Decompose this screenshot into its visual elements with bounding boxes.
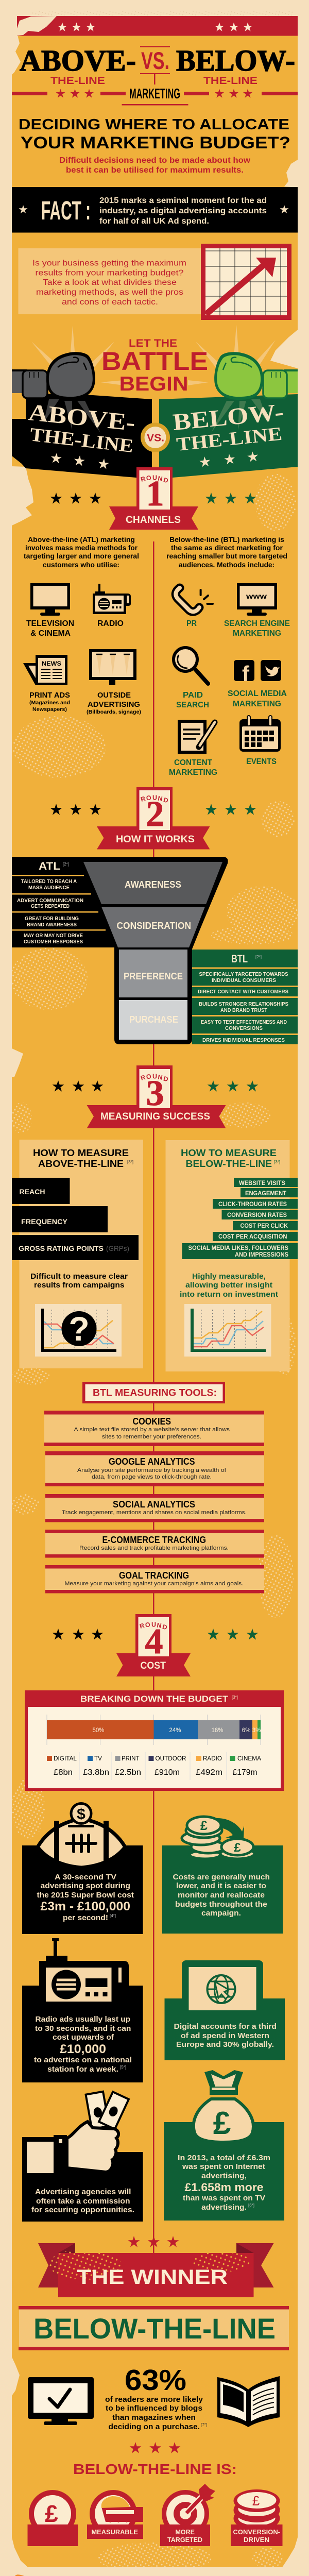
panel: BTL list: DIRECT CONTACT WITH CUSTOMERS bbox=[198, 989, 288, 995]
panel: how to measure above-the-line: HOW TO MEASURE bbox=[33, 1147, 129, 1158]
panel: super bowl cost: £3m - £100,000 bbox=[40, 1900, 130, 1913]
panel: how to measure below-the-line: AND IMPRESSIONS bbox=[235, 1252, 288, 1258]
icon: radio: RADIO bbox=[97, 619, 124, 628]
icon: paid search magnifier bbox=[174, 648, 209, 709]
panel: super bowl cost: A 30-second TV bbox=[55, 1873, 116, 1882]
round 4 badge bbox=[53, 1614, 258, 1676]
panel: internet spend: was spent on Internet bbox=[182, 2163, 265, 2171]
round 2 badge: HOW IT WORKS bbox=[116, 834, 195, 845]
chart: breaking down the budget: RADIO bbox=[203, 1755, 222, 1762]
panel: radio ads bbox=[22, 1938, 143, 2082]
chart: breaking down the budget bbox=[25, 1690, 284, 1791]
panel: BTL list: AND BRAND TRUST bbox=[220, 1008, 267, 1013]
panel: radio ads: station for a week. bbox=[47, 2065, 118, 2074]
panel: internet spend: advertising, bbox=[201, 2172, 247, 2180]
icon: content marketing bbox=[169, 720, 217, 777]
panel: cookies: COOKIES bbox=[133, 1416, 171, 1427]
panel: lower costs: budgets throughout the bbox=[175, 1901, 267, 1909]
panel: e-commerce tracking bbox=[45, 1530, 264, 1558]
panel: below-the-line fighter: THE-LINE bbox=[176, 423, 283, 455]
icon: conversion-driven: DRIVEN bbox=[244, 2536, 269, 2544]
panel: fact band: FACT : bbox=[41, 196, 91, 225]
chart: breaking down the budget: TV bbox=[94, 1755, 102, 1762]
chart: breaking down the budget: 16% bbox=[211, 1727, 224, 1734]
icon: radio bbox=[93, 584, 131, 628]
icon: billboard: ADVERTISING bbox=[88, 700, 140, 709]
text: ATL definition: involves mass media methods for bbox=[25, 544, 138, 552]
stat: 63 percent: deciding on a purchase. bbox=[108, 2423, 200, 2431]
icon: events calendar: EVENTS bbox=[246, 757, 277, 766]
panel: lower costs: £ bbox=[234, 1841, 241, 1855]
panel: how to measure above-the-line: results from campaigns bbox=[34, 1281, 125, 1290]
funnel chart bbox=[12, 857, 228, 1044]
panel: how to measure below-the-line: HOW TO MEASURE bbox=[181, 1147, 277, 1158]
icon: more targeted: MORE bbox=[175, 2528, 195, 2536]
round 4 badge: COST bbox=[140, 1660, 166, 1671]
title: ABOVE- bbox=[20, 44, 136, 77]
subtitle heading: Difficult decisions need to be made about how bbox=[59, 156, 251, 165]
title: THE-LINE bbox=[50, 75, 105, 87]
panel: BTL list: BUILDS STRONGER RELATIONSHIPS bbox=[199, 1002, 288, 1007]
panel: how to measure above-the-line: REACH bbox=[20, 1188, 45, 1196]
icon: more targeted: TARGETED bbox=[167, 2536, 202, 2544]
icon: print ads: Newspapers) bbox=[32, 706, 67, 713]
panel: above-the-line fighter: THE-LINE bbox=[29, 424, 134, 457]
round 2 badge: 2 bbox=[146, 794, 164, 834]
chart: breaking down the budget: £8bn bbox=[54, 1768, 73, 1777]
panel: ATL list: ATL bbox=[39, 860, 60, 872]
panel: fact band: 2015 marks a seminal moment for the ad bbox=[99, 196, 267, 205]
panel: how to measure below-the-line: COST PER CLICK bbox=[240, 1223, 288, 1229]
chart: breaking down the budget: £2.5bn bbox=[115, 1768, 141, 1777]
heading: winner below-the-line bbox=[19, 2306, 289, 2350]
heading: winner below-the-line: BELOW-THE-LINE bbox=[33, 2312, 276, 2345]
text: BTL definition: audiences. Methods include: bbox=[179, 561, 274, 569]
panel: goal tracking bbox=[45, 1565, 264, 1593]
stat: 63 percent: 63% bbox=[125, 2364, 186, 2397]
panel: ATL list: [2*] bbox=[63, 862, 69, 867]
panel: how to measure below-the-line: COST PER ACQUISITION bbox=[218, 1234, 287, 1240]
chart: breaking down the budget: 24% bbox=[169, 1727, 181, 1734]
panel: how to measure above-the-line: Difficult to measure clear bbox=[30, 1272, 128, 1281]
icon: growth chart bbox=[201, 244, 291, 320]
chart: breaking down the budget: BREAKING DOWN THE BUDGET bbox=[80, 1694, 229, 1704]
round 3 badge: MEASURING SUCCESS bbox=[100, 1111, 210, 1122]
panel: goal tracking: GOAL TRACKING bbox=[119, 1570, 189, 1581]
panel: ATL list: GETS REPEATED bbox=[31, 904, 70, 909]
icon: cost effective: £ bbox=[45, 2500, 58, 2527]
text: ATL definition bbox=[24, 536, 139, 569]
heading: BTL measuring tools bbox=[82, 1382, 225, 1403]
chart: breaking down the budget: 6% bbox=[242, 1727, 250, 1734]
panel: fact band: industry, as digital advertising accounts bbox=[99, 207, 267, 215]
panel: ATL list: MAY OR MAY NOT DRIVE bbox=[24, 933, 83, 939]
round 3 badge: ROUND bbox=[140, 1073, 169, 1083]
panel: super bowl cost bbox=[22, 1802, 143, 1934]
panel: BTL list bbox=[192, 950, 298, 1044]
panel: digital share: Europe and 30% globally. bbox=[176, 2041, 274, 2049]
heading: let the battle begin: BEGIN bbox=[119, 373, 188, 395]
panel: how to measure above-the-line: (GRPs) bbox=[106, 1244, 129, 1252]
funnel chart: PREFERENCE bbox=[124, 971, 183, 981]
intro text block: results from your marketing budget? bbox=[35, 269, 184, 277]
subtitle heading: DECIDING WHERE TO ALLOCATE bbox=[19, 116, 289, 133]
panel: how to measure above-the-line: ABOVE-THE-LINE bbox=[38, 1158, 124, 1169]
icon: monitor with check bbox=[28, 2377, 94, 2425]
chart: breaking down the budget: DIGITAL bbox=[54, 1755, 77, 1762]
icon: print ads: NEWS bbox=[42, 660, 61, 667]
round 1 badge: ROUND bbox=[140, 474, 169, 484]
heading: let the battle begin: BATTLE bbox=[101, 347, 208, 376]
chart: breaking down the budget: OUTDOOR bbox=[156, 1755, 186, 1762]
text: ATL definition: customers who utilise: bbox=[43, 561, 119, 569]
panel: social analytics: SOCIAL ANALYTICS bbox=[113, 1499, 195, 1510]
panel: agency commission: often take a commission bbox=[36, 2197, 130, 2206]
icon: search engine marketing: www bbox=[246, 592, 267, 600]
panel: BTL list: BTL bbox=[231, 953, 248, 965]
panel: lower costs: lower, and it is easier to bbox=[176, 1882, 266, 1890]
intro text block: and cons of each tactic. bbox=[62, 298, 158, 307]
icon: PR telephone bbox=[176, 588, 213, 628]
icon: events calendar bbox=[239, 716, 281, 766]
panel: ATL list: ADVERT COMMUNICATION bbox=[17, 898, 83, 904]
panel: social analytics bbox=[45, 1494, 264, 1522]
subtitle heading: YOUR MARKETING BUDGET? bbox=[21, 133, 290, 152]
panel: BTL list: EASY TO TEST EFFECTIVENESS AND bbox=[201, 1020, 287, 1025]
heading: below-the-line is bbox=[73, 2442, 237, 2477]
panel: super bowl cost: $ bbox=[77, 1806, 85, 1823]
icon: content marketing: CONTENT bbox=[174, 758, 213, 767]
panel: radio ads: [5*] bbox=[120, 2065, 126, 2070]
panel: ATL list: CUSTOMER RESPONSES bbox=[24, 939, 83, 945]
text: BTL definition: reaching smaller but more targeted bbox=[166, 552, 287, 560]
text: ATL definition: targeting larger and more general bbox=[24, 552, 139, 560]
panel: e-commerce tracking: Record sales and track profitable marketing platforms. bbox=[79, 1545, 229, 1551]
chart: breaking down the budget: £179m bbox=[233, 1768, 258, 1777]
panel: how to measure below-the-line: CONVERSION RATES bbox=[227, 1212, 287, 1218]
banner: the winner: THE WINNER bbox=[77, 2266, 228, 2289]
intro text block: Take a look at what divides these bbox=[43, 278, 177, 287]
chart: clear results bbox=[184, 1304, 271, 1357]
heading: let the battle begin bbox=[31, 325, 276, 395]
stat: 63 percent: of readers are more likely bbox=[105, 2396, 203, 2404]
vs badge bbox=[141, 422, 170, 452]
panel: above-the-line fighter bbox=[12, 352, 152, 479]
panel: ATL list: GREAT FOR BUILDING bbox=[25, 916, 79, 922]
stat: 63 percent: than magazines when bbox=[112, 2414, 196, 2422]
panel: internet spend: £1.658m more bbox=[184, 2181, 264, 2194]
icon: search engine marketing: SEARCH ENGINE bbox=[224, 619, 290, 628]
chart: breaking down the budget: £910m bbox=[154, 1768, 180, 1777]
panel: google analytics: GOOGLE ANALYTICS bbox=[109, 1456, 195, 1467]
text: BTL definition: the same as direct marketing for bbox=[171, 544, 283, 552]
panel: digital share: Digital accounts for a third bbox=[174, 2023, 277, 2031]
panel: radio ads: cost upwards of bbox=[53, 2033, 114, 2042]
panel: google analytics bbox=[45, 1451, 264, 1486]
panel: BTL list: SPECIFICALLY TARGETED TOWARDS bbox=[199, 972, 288, 977]
panel: radio ads: Radio ads usually last up bbox=[35, 2015, 130, 2024]
panel: internet spend: [6*] bbox=[248, 2203, 254, 2208]
panel: fact band: for half of all UK Ad spend. bbox=[99, 217, 209, 226]
panel: digital share bbox=[165, 1960, 285, 2060]
logo: koozai bbox=[14, 2575, 107, 2576]
panel: BTL list: CONVERSIONS bbox=[225, 1026, 263, 1031]
title: BELOW- bbox=[176, 44, 295, 77]
icon: television bbox=[26, 583, 74, 638]
panel: ATL list: MASS AUDIENCE bbox=[28, 885, 70, 891]
panel: super bowl cost: the 2015 Super Bowl cost bbox=[37, 1891, 134, 1900]
panel: lower costs bbox=[162, 1817, 283, 1934]
panel: social analytics: Track engagement, mentions and shares on social media platforms. bbox=[62, 1510, 247, 1516]
icon: cost effective bbox=[28, 2490, 78, 2546]
icon: print ads: PRINT ADS bbox=[29, 691, 70, 700]
chart: breaking down the budget: £492m bbox=[196, 1768, 222, 1777]
panel: BTL list: DRIVES INDIVIDUAL RESPONSES bbox=[202, 1038, 285, 1043]
chart: breaking down the budget: CINEMA bbox=[237, 1755, 261, 1762]
panel: e-commerce tracking: E-COMMERCE TRACKING bbox=[102, 1535, 206, 1545]
heading: BTL measuring tools: BTL MEASURING TOOLS: bbox=[93, 1388, 217, 1398]
panel: how to measure below-the-line: WEBSITE VISITS bbox=[239, 1180, 285, 1187]
stat: 63 percent: to be influenced by blogs bbox=[106, 2404, 202, 2413]
panel: lower costs: Costs are generally much bbox=[173, 1873, 270, 1882]
title bbox=[12, 44, 298, 105]
panel: cookies bbox=[44, 1411, 264, 1446]
panel: how to measure above-the-line: GROSS RATING POINTS bbox=[19, 1244, 104, 1252]
panel: digital share: of ad spend in Western bbox=[181, 2032, 269, 2040]
icon: social media: MARKETING bbox=[233, 700, 281, 708]
panel: lower costs: £ bbox=[200, 1819, 208, 1833]
panel: google analytics: data, from page views to click-through rate. bbox=[92, 1474, 212, 1480]
panel: internet spend: advertising. bbox=[201, 2204, 247, 2212]
stat: 63 percent: [7*] bbox=[201, 2422, 207, 2427]
panel: lower costs: monitor and reallocate bbox=[178, 1891, 265, 1900]
panel: how to measure below-the-line: BELOW-THE-LINE bbox=[185, 1158, 272, 1169]
icon: television: TELEVISION bbox=[26, 619, 74, 628]
funnel chart: CONSIDERATION bbox=[116, 921, 191, 931]
icon: social media: f bbox=[242, 662, 250, 686]
panel: ATL list bbox=[12, 860, 106, 945]
icon: measurable bbox=[87, 2490, 143, 2539]
funnel chart: AWARENESS bbox=[125, 879, 181, 890]
round 3 badge: 3 bbox=[146, 1074, 164, 1113]
icon: open book bbox=[217, 2376, 280, 2427]
panel: internet spend: £ bbox=[213, 2106, 231, 2141]
panel: how to measure below-the-line: allowing better insight bbox=[185, 1281, 272, 1290]
icon: search engine marketing: MARKETING bbox=[233, 629, 281, 638]
panel: internet spend bbox=[164, 2070, 284, 2221]
panel: how to measure below-the-line: ENGAGEMENT bbox=[245, 1191, 286, 1197]
header band bbox=[12, 16, 298, 36]
title: THE-LINE bbox=[203, 75, 258, 87]
title: VS. bbox=[141, 47, 169, 74]
panel: below-the-line fighter bbox=[159, 352, 298, 479]
panel: how to measure below-the-line: SOCIAL MEDIA LIKES, FOLLOWERS bbox=[188, 1245, 288, 1251]
panel: below-the-line fighter: BELOW- bbox=[171, 398, 285, 435]
icon: PR telephone: PR bbox=[186, 619, 197, 628]
icon: content marketing: MARKETING bbox=[169, 768, 217, 777]
text: BTL definition bbox=[166, 536, 287, 569]
intro text block: marketing methods, as well the pros bbox=[36, 288, 183, 297]
icon: paid search magnifier: PAID bbox=[183, 691, 203, 700]
panel: radio ads: to 30 seconds, and it can bbox=[35, 2025, 131, 2033]
chart: breaking down the budget: 50% bbox=[92, 1727, 105, 1734]
round 4 badge: ROUND bbox=[139, 1621, 168, 1631]
panel: radio ads: £10,000 bbox=[60, 2042, 106, 2056]
chart: breaking down the budget: PRINT bbox=[122, 1755, 140, 1762]
vs badge: VS. bbox=[147, 433, 164, 444]
panel: agency commission: Advertising agencies will bbox=[35, 2188, 131, 2196]
icon: conversion-driven bbox=[231, 2489, 282, 2546]
icon: search engine marketing bbox=[224, 583, 290, 638]
panel: internet spend: than was spent on TV bbox=[183, 2194, 265, 2202]
chart: breaking down the budget: 3% bbox=[252, 1727, 261, 1734]
panel: super bowl cost: per second! bbox=[63, 1914, 108, 1922]
intro text block: Is your business getting the maximum bbox=[32, 259, 186, 268]
round 4 badge: 4 bbox=[145, 1622, 163, 1662]
icon: conversion-driven: £ bbox=[252, 2493, 260, 2509]
icon: social media: SOCIAL MEDIA bbox=[228, 689, 287, 698]
round 2 badge bbox=[50, 787, 256, 849]
panel: cookies: A simple text file stored by a website's server that allows bbox=[74, 1427, 230, 1433]
icon: print ads: (Magazines and bbox=[29, 700, 70, 706]
panel: above-the-line fighter: ABOVE- bbox=[27, 399, 136, 436]
round 1 badge: 1 bbox=[146, 474, 164, 514]
panel: agency commission bbox=[22, 2092, 143, 2222]
intro text block bbox=[19, 248, 201, 314]
panel: lower costs: campaign. bbox=[201, 1909, 241, 1918]
panel: how to measure below-the-line bbox=[166, 1140, 298, 1371]
panel: internet spend: In 2013, a total of £6.3m bbox=[178, 2154, 270, 2162]
panel: fact band bbox=[12, 187, 298, 233]
heading: below-the-line is: BELOW-THE-LINE IS: bbox=[73, 2461, 237, 2477]
chart: breaking down the budget: £3.8bn bbox=[83, 1768, 109, 1777]
panel: cookies: sites to remember your preferences. bbox=[102, 1434, 201, 1440]
panel: radio ads: to advertise on a national bbox=[34, 2056, 132, 2064]
icon: print ads bbox=[23, 655, 70, 713]
funnel chart: PURCHASE bbox=[129, 1014, 178, 1025]
panel: goal tracking: Measure your marketing against your campaign's aims and goals. bbox=[65, 1581, 244, 1587]
subtitle heading bbox=[19, 116, 290, 175]
panel: super bowl cost: [4*] bbox=[110, 1913, 116, 1918]
panel: how to measure above-the-line: [3*] bbox=[127, 1160, 133, 1164]
text: ATL definition: Above-the-line (ATL) marketing bbox=[28, 536, 135, 544]
icon: television: & CINEMA bbox=[30, 629, 71, 638]
icon: more targeted bbox=[160, 2484, 215, 2546]
icon: paid search magnifier: SEARCH bbox=[176, 701, 209, 709]
title: MARKETING bbox=[129, 86, 180, 101]
panel: ATL list: TAILORED TO REACH A bbox=[21, 879, 77, 885]
icon: billboard: (Billboards, signage) bbox=[87, 709, 141, 715]
panel: how to measure below-the-line: CLICK-THROUGH RATES bbox=[218, 1201, 287, 1208]
panel: super bowl cost: advertising spot during bbox=[40, 1882, 130, 1890]
icon: social media bbox=[228, 660, 287, 708]
panel: BTL list: [2*] bbox=[255, 955, 262, 959]
round 1 badge: CHANNELS bbox=[126, 515, 181, 526]
icon: billboard: OUTSIDE bbox=[97, 691, 131, 700]
icon: billboard bbox=[87, 649, 141, 715]
panel: how to measure above-the-line bbox=[12, 1140, 143, 1368]
panel: how to measure below-the-line: [3*] bbox=[274, 1160, 280, 1164]
chart: unclear results: ? bbox=[68, 1310, 90, 1348]
panel: how to measure below-the-line: into return on investment bbox=[180, 1290, 278, 1299]
center divider line bbox=[153, 541, 154, 2253]
panel: google analytics: Analyse your site performance by tracking a wealth of bbox=[77, 1467, 227, 1473]
text: BTL definition: Below-the-line (BTL) marketing is bbox=[169, 536, 284, 544]
icon: conversion-driven: CONVERSION- bbox=[233, 2528, 280, 2536]
panel: ATL list: BRAND AWARENESS bbox=[27, 922, 77, 928]
panel: agency commission: for securing opportunities. bbox=[31, 2206, 134, 2214]
heading: let the battle begin: LET THE bbox=[129, 337, 177, 349]
panel: how to measure above-the-line: FREQUENCY bbox=[21, 1217, 68, 1226]
panel: how to measure below-the-line: Highly measurable, bbox=[192, 1272, 266, 1281]
banner: the winner bbox=[38, 2236, 274, 2297]
round 1 badge bbox=[50, 467, 256, 530]
stat: 63 percent bbox=[105, 2364, 207, 2431]
panel: BTL list: INDIVIDUAL CONSUMERS bbox=[212, 978, 276, 984]
round 2 badge: ROUND bbox=[140, 794, 169, 804]
icon: measurable: MEASURABLE bbox=[92, 2528, 138, 2536]
round 3 badge bbox=[53, 1065, 258, 1128]
subtitle heading: best it can be utilised for maximum results. bbox=[66, 166, 244, 175]
chart: unclear results bbox=[35, 1304, 122, 1357]
chart: breaking down the budget: [3*] bbox=[232, 1695, 238, 1700]
